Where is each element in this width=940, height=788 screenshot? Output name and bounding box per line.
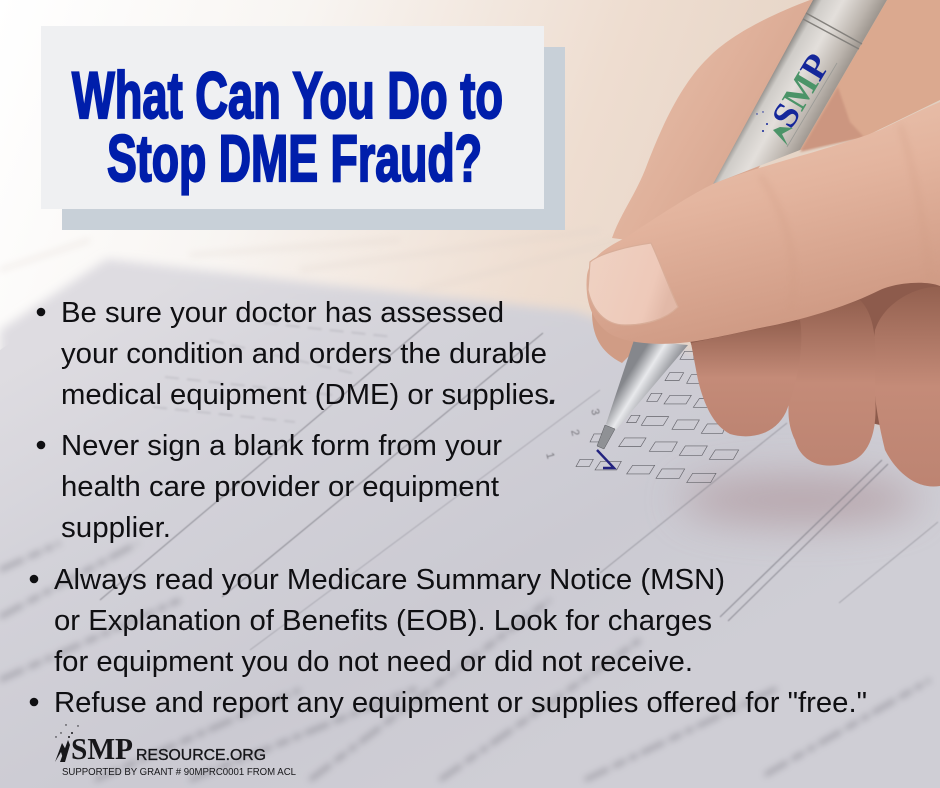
background: paper form (0, 259, 940, 788)
logo stars and figure (55, 724, 79, 762)
back of hand (800, 0, 940, 150)
hand holding pen (587, 0, 940, 487)
footer logo (55, 724, 296, 778)
pen lower section (606, 340, 688, 430)
hand shadow beside pen (800, 87, 864, 152)
thumbnail (588, 243, 678, 325)
pen SMP logo: SMP (764, 47, 838, 134)
palm shadow behind fingers (688, 270, 940, 425)
bullet: doctor assessment: medical equipment (DME) or supplies. (61, 379, 557, 411)
form row numbers: 3 (588, 408, 601, 417)
form rule lines (100, 320, 938, 650)
pen rings (803, 13, 862, 49)
logo wordmark: SMP (71, 731, 133, 766)
checkbox grid on form (576, 351, 739, 483)
blurred printed text streaks (0, 543, 930, 780)
thumb (587, 102, 940, 344)
faint checkbox rows on form (153, 323, 394, 422)
title (72, 58, 503, 195)
pen barrel (713, 0, 887, 184)
bullet: blank forms: supplier. (61, 512, 171, 544)
logo domain: RESOURCE.ORG (136, 747, 266, 764)
form row numbers: 2 (568, 428, 581, 437)
bullet: blank forms: health care provider or equipment (61, 471, 499, 503)
bullet: doctor assessment: Be sure your doctor has assessed (61, 297, 504, 329)
second finger (788, 300, 876, 466)
third finger (873, 287, 940, 487)
shadow under fingers (680, 476, 920, 524)
grant credit: SUPPORTED BY GRANT # 90MPRC0001 FROM ACL (62, 767, 296, 778)
pen tip (597, 425, 615, 449)
bullet: read MSN or EOB: Always read your Medicare Summary Notice (MSN) (54, 564, 725, 596)
pen check mark (597, 450, 614, 468)
form row numbers (543, 408, 601, 460)
title panel (41, 26, 544, 209)
bullet: blank forms: Never sign a blank form from your (61, 430, 502, 462)
title: Stop DME Fraud? (107, 121, 482, 195)
bullet: doctor assessment (37, 297, 557, 411)
bullet: read MSN or EOB (30, 564, 725, 678)
first finger (691, 320, 801, 436)
bullet: refuse free equipment: Refuse and report any equipment or supplies offered for "free." (54, 687, 867, 719)
bullet: blank forms (37, 430, 502, 544)
upper index finger (612, 0, 850, 250)
bullet: doctor assessment: your condition and orders the durable (61, 338, 547, 370)
bullet: read MSN or EOB: for equipment you do not need or did not receive. (54, 646, 693, 678)
form row numbers: 1 (543, 451, 556, 460)
bullet list (30, 297, 867, 719)
under-thumb finger (592, 312, 640, 363)
title: What Can You Do to (72, 58, 503, 132)
bullet: read MSN or EOB: or Explanation of Benefits (EOB). Look for charges (54, 605, 712, 637)
thumb shading (760, 125, 930, 310)
title panel shadow (62, 47, 565, 230)
